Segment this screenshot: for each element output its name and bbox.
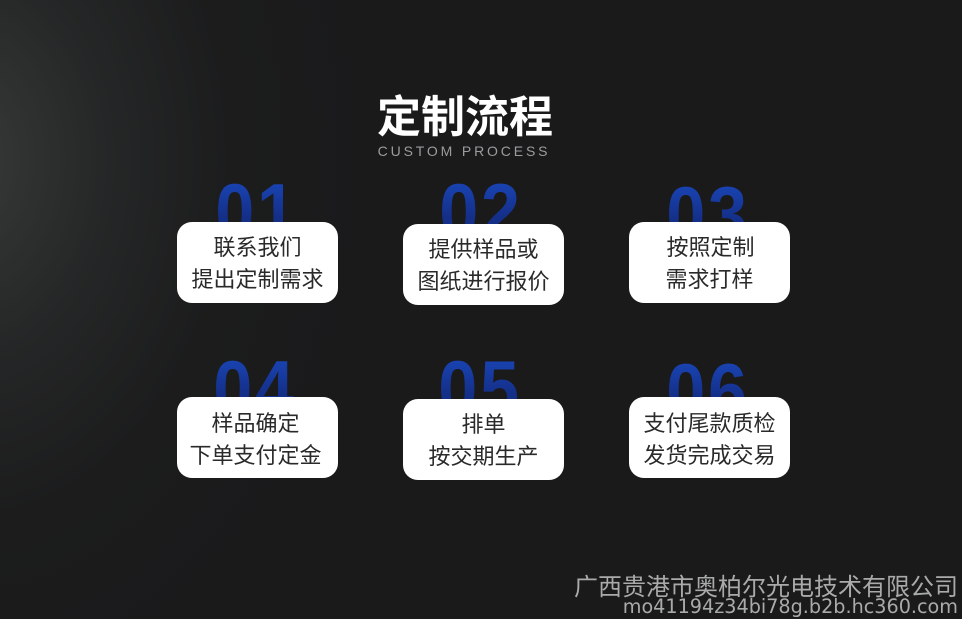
step 6 card: 支付尾款质检 xyxy=(643,411,776,436)
step 2 card: 提供样品或 xyxy=(428,237,538,262)
step 6 card: 发货完成交易 xyxy=(643,443,776,468)
step 5 card: 排单 xyxy=(461,412,506,437)
step 2 card xyxy=(403,224,564,305)
step 3 card xyxy=(629,222,790,303)
step 4 card: 样品确定 xyxy=(211,411,300,436)
step 4 card: 下单支付定金 xyxy=(189,443,322,468)
title: 定制流程 xyxy=(377,93,553,142)
step 1 card: 联系我们 xyxy=(213,235,302,260)
step 4 card xyxy=(177,397,338,478)
watermark company name: 广西贵港市奥柏尔光电技术有限公司 xyxy=(574,567,958,602)
step 5 card: 按交期生产 xyxy=(428,444,538,469)
step 3 card: 需求打样 xyxy=(665,267,754,292)
subtitle: CUSTOM PROCESS xyxy=(378,143,550,159)
step 5 card xyxy=(403,399,564,480)
step 1 card xyxy=(177,222,338,303)
step 2 card: 图纸进行报价 xyxy=(417,269,550,294)
watermark url: mo41194z34bi78g.b2b.hc360.com xyxy=(623,595,958,618)
step 6 card xyxy=(629,397,790,478)
step 3 card: 按照定制 xyxy=(666,235,754,260)
step 1 card: 提出定制需求 xyxy=(191,267,324,292)
